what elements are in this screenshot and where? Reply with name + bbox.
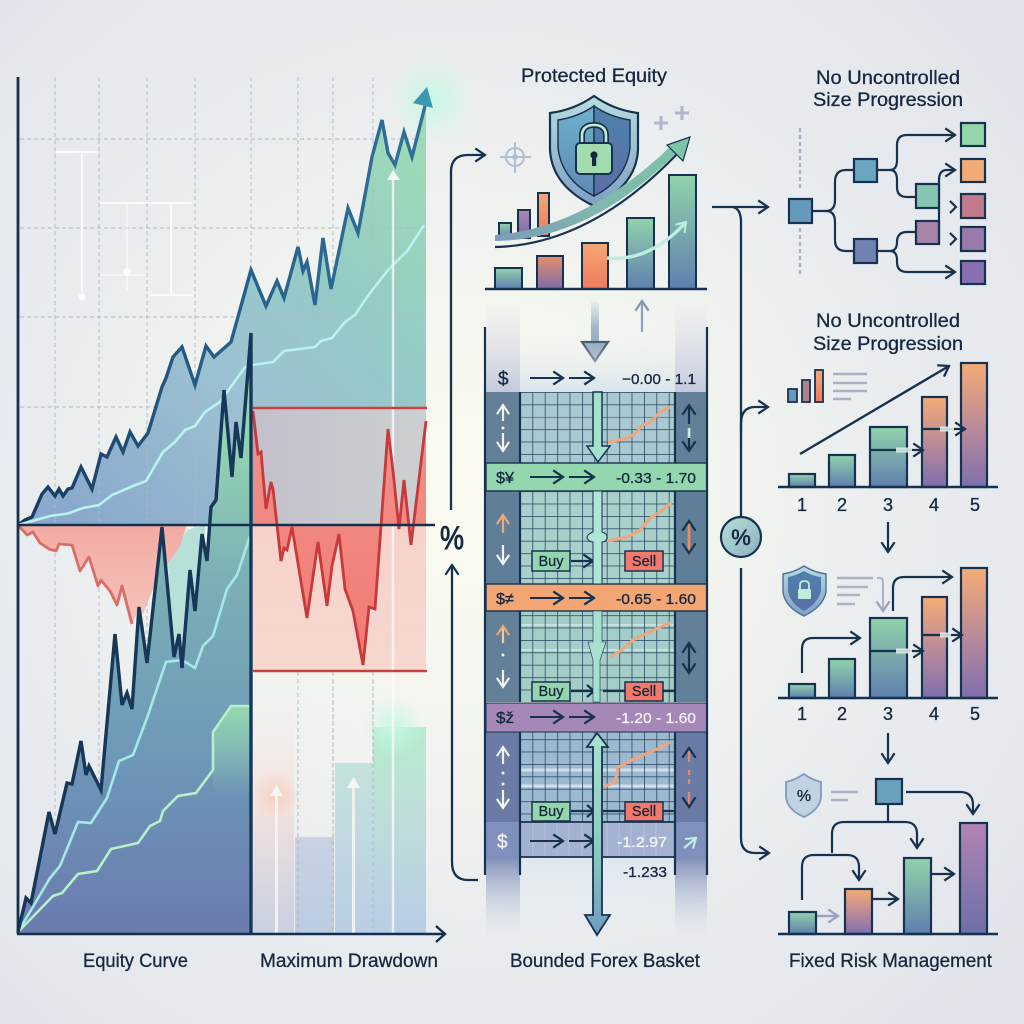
right faded bars [252, 680, 426, 934]
icon: small shield lock [783, 566, 826, 616]
arrow: sweeping growth [495, 137, 690, 247]
title: no uncontrolled size progression one: Size Progression [813, 90, 963, 111]
buy sell buttons row 2: Buy [538, 684, 564, 700]
title: no uncontrolled size progression one: No Uncontrolled [816, 68, 960, 89]
decorative white brackets [56, 152, 193, 300]
band: orange range: $≠ [496, 591, 514, 608]
line: rising equity [18, 106, 425, 525]
band: usd jpy range: $¥ [496, 470, 514, 487]
chart: fixed size stepped bars: 3 [883, 704, 893, 724]
connector: main branch lines [712, 207, 769, 853]
arrow: down to chart three [887, 522, 889, 552]
line: red drawdown left [18, 525, 132, 624]
percent symbol and side connector [440, 155, 485, 880]
line: pale average [18, 225, 424, 525]
arrow: down to chart four [887, 733, 889, 763]
side arrows rows [502, 405, 689, 808]
arrow: white upward [392, 178, 394, 934]
diagram: branching tree [789, 123, 985, 284]
arrow head: white upward [387, 170, 400, 180]
line: pale green lower [18, 706, 250, 932]
line: pale average lower [18, 536, 250, 932]
panel: forex basket ladder [485, 302, 707, 935]
chart: size progression stepped bars: 1 [797, 495, 807, 515]
chart: fixed size stepped bars: 4 [929, 704, 939, 724]
chart: fixed size stepped bars: 1 [797, 704, 807, 724]
bottom row [486, 822, 707, 935]
note lines with connector [837, 578, 883, 611]
chart: protected equity bars [485, 175, 707, 289]
buy sell buttons row 2: Sell [632, 684, 656, 700]
arrow: light inner curve [607, 222, 686, 258]
area: rising equity [18, 100, 426, 525]
icon: percent badge: % [731, 525, 751, 550]
title: protected equity: Protected Equity [521, 66, 668, 87]
title: no uncontrolled size progression two [813, 311, 963, 355]
bottom row: -1.233 [623, 865, 667, 881]
band: purple range: $ž [496, 710, 514, 727]
chart: size progression stepped bars: 2 [837, 495, 847, 515]
buy sell buttons row 2 [532, 682, 674, 701]
icon: percent shield: % [797, 788, 811, 805]
bottom row: $ [497, 832, 508, 853]
note lines: percent [831, 792, 858, 800]
title: no uncontrolled size progression two: Size Progression [813, 334, 963, 355]
line: red drawdown right [253, 411, 426, 665]
arrows: white faded [270, 777, 360, 934]
icon: percent shield [786, 774, 821, 817]
side columns [486, 392, 707, 822]
buy sell buttons row 3: Buy [538, 804, 564, 820]
label: maximum drawdown: Maximum Drawdown [260, 951, 438, 972]
frame lines [485, 327, 707, 875]
title: no uncontrolled size progression one [813, 68, 963, 111]
chart: fixed size stepped bars: 5 [970, 704, 980, 724]
label: bounded forex basket: Bounded Forex Basket [510, 951, 701, 972]
label: equity curve: Equity Curve [83, 951, 188, 972]
buy sell buttons row 3 [532, 802, 674, 821]
title: no uncontrolled size progression two: No Uncontrolled [816, 311, 960, 332]
icon: plus signs [654, 106, 689, 130]
arrow: small up [641, 301, 643, 332]
center arrow segments [585, 392, 610, 935]
band: orange range: -0.65 - 1.60 [616, 591, 696, 608]
chart: fixed size stepped bars: 2 [837, 704, 847, 724]
icon: target [500, 142, 531, 173]
chart: size progression stepped bars: 5 [970, 495, 980, 515]
panel: equity and drawdown chart [17, 58, 474, 942]
buy sell buttons row 1: Sell [632, 554, 656, 570]
glow: top right of chart [390, 58, 474, 142]
chart: size progression stepped bars: 3 [883, 495, 893, 515]
area: lower equity [18, 333, 251, 934]
band: usd jpy range: -0.33 - 1.70 [616, 470, 696, 487]
chart: size progression stepped bars [778, 363, 998, 515]
area: negative drawdown left [18, 525, 187, 624]
price traces [603, 407, 671, 787]
axes [17, 77, 445, 942]
buy sell buttons row 3: Sell [632, 804, 656, 820]
buy sell buttons row 1 [532, 551, 663, 571]
band: purple range [486, 703, 707, 732]
percent symbol and side connector: % [440, 520, 464, 556]
top row [486, 302, 707, 392]
band: usd jpy range [486, 463, 707, 491]
top row: $ [498, 369, 509, 390]
bottom row: -1.2.97 [617, 834, 667, 851]
band: purple range: -1.20 - 1.60 [616, 710, 696, 727]
drawdown box [253, 408, 426, 671]
icon: percent badge [721, 517, 761, 557]
mint gap [168, 525, 205, 650]
grid cells [520, 392, 675, 822]
arrow: large down [582, 302, 608, 361]
chart: fixed size stepped bars [778, 568, 998, 724]
area: red drawdown right [253, 411, 426, 665]
icon: growth arrow head [413, 87, 433, 108]
chart: size progression stepped bars: 4 [929, 495, 939, 515]
area: green glow step [213, 706, 250, 800]
buy sell buttons row 1: Buy [538, 554, 564, 570]
line: dark lower equity [18, 333, 251, 934]
band: orange range [486, 584, 707, 611]
diagram: fixed risk management [778, 779, 998, 934]
lines: drawdown limits [253, 408, 427, 671]
label: fixed risk management: Fixed Risk Management [789, 951, 993, 972]
icon: shield with padlock [550, 96, 638, 206]
top row: −0.00 - 1.1 [622, 371, 696, 388]
